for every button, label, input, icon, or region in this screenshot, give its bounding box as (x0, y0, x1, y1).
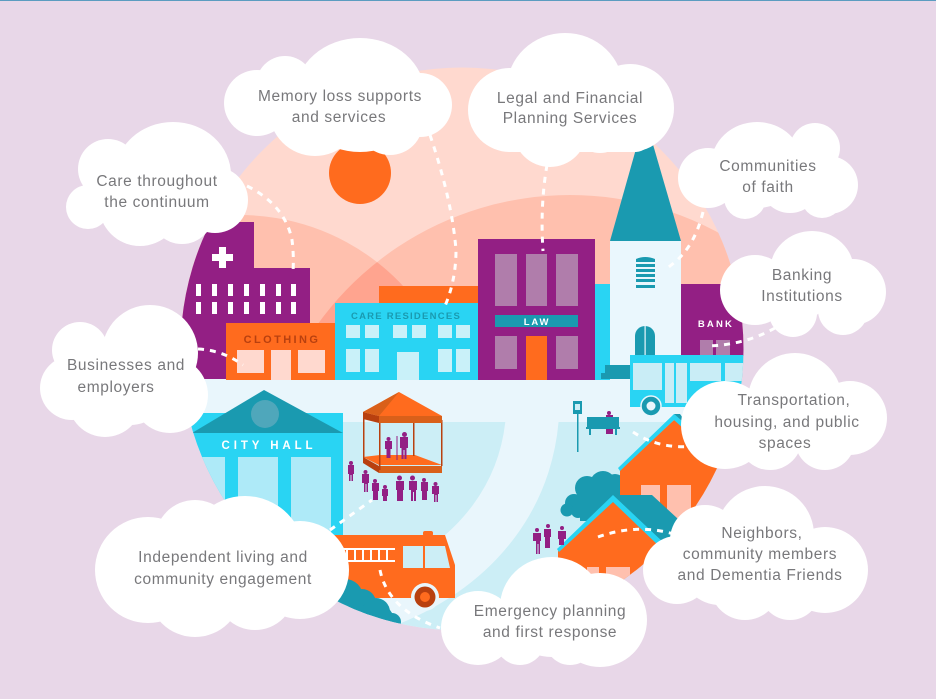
cloud: memory loss supports (224, 38, 452, 156)
cloud: legal and financial (468, 33, 674, 167)
cloud: businesses and employers: employers (77, 379, 155, 396)
cloud: communities of faith: Communities (719, 158, 817, 175)
cloud: neighbors and dementia friends: community members (683, 546, 837, 563)
cloud: independent living (95, 496, 349, 637)
cloud: neighbors and dementia friends (643, 486, 868, 620)
gazebo (363, 392, 442, 473)
church (595, 145, 681, 380)
hills (182, 195, 744, 363)
city hall: CITY HALL (222, 440, 316, 452)
fire truck (330, 531, 455, 611)
cloud: neighbors and dementia friends: Neighbors, (721, 525, 803, 542)
cloud: transportation housing public spaces: spaces (759, 435, 811, 452)
cloud: memory loss supports: and services (292, 109, 386, 126)
cloud: neighbors and dementia friends: and Dementia Friends (678, 567, 842, 584)
cloud: transportation housing public spaces: housing, and public (714, 414, 860, 431)
cloud: banking institutions: Institutions (761, 288, 843, 305)
law office: LAW (524, 317, 550, 328)
cloud: care throughout the continuum: the continuum (104, 194, 210, 211)
cloud: emergency planning: Emergency planning (474, 603, 626, 620)
people at gazebo (348, 432, 439, 502)
cloud: care throughout the continuum: Care throughout (96, 173, 218, 190)
town scene (182, 68, 744, 630)
bushes lower left (338, 579, 401, 624)
care residences: CARE RESIDENCES (351, 311, 461, 322)
neighbors people (533, 524, 566, 554)
bus stop and bench (573, 401, 620, 452)
cloud: transportation housing public spaces (681, 353, 887, 470)
cloud: memory loss supports: Memory loss supports (258, 88, 422, 105)
cloud: transportation housing public spaces: Transportation, (738, 392, 850, 409)
cloud: businesses and employers: Businesses and (67, 357, 185, 374)
cloud: legal and financial: Planning Services (503, 110, 637, 127)
cloud: care throughout the continuum (66, 122, 248, 246)
house lower (557, 495, 678, 580)
connector dashes (198, 135, 775, 628)
icon: hospital cross (212, 247, 233, 268)
cloud: communities of faith (678, 122, 858, 219)
city hall (192, 390, 343, 535)
law office (478, 239, 595, 380)
cloud: independent living: Independent living and (138, 549, 308, 566)
ground (180, 379, 750, 642)
cloud: emergency planning (441, 557, 647, 667)
hospital windows (196, 284, 296, 314)
cloud: banking institutions: Banking (772, 267, 832, 284)
cloud: independent living: community engagement (134, 571, 312, 588)
care residences (335, 286, 478, 380)
cloud: legal and financial: Legal and Financial (497, 90, 643, 107)
clothing store: CLOTHING (244, 334, 320, 346)
cloud: banking institutions (720, 231, 886, 337)
cloud: businesses and employers (40, 305, 208, 437)
cloud: communities of faith: of faith (742, 179, 794, 196)
cloud: emergency planning: and first response (483, 624, 617, 641)
tree bush (560, 471, 625, 521)
house upper (618, 414, 717, 518)
sun (329, 149, 391, 204)
clothing store (226, 323, 335, 380)
bus (630, 355, 755, 416)
sky (239, 68, 718, 262)
bank: BANK (698, 319, 734, 330)
hospital (170, 222, 310, 379)
bank (681, 284, 744, 356)
